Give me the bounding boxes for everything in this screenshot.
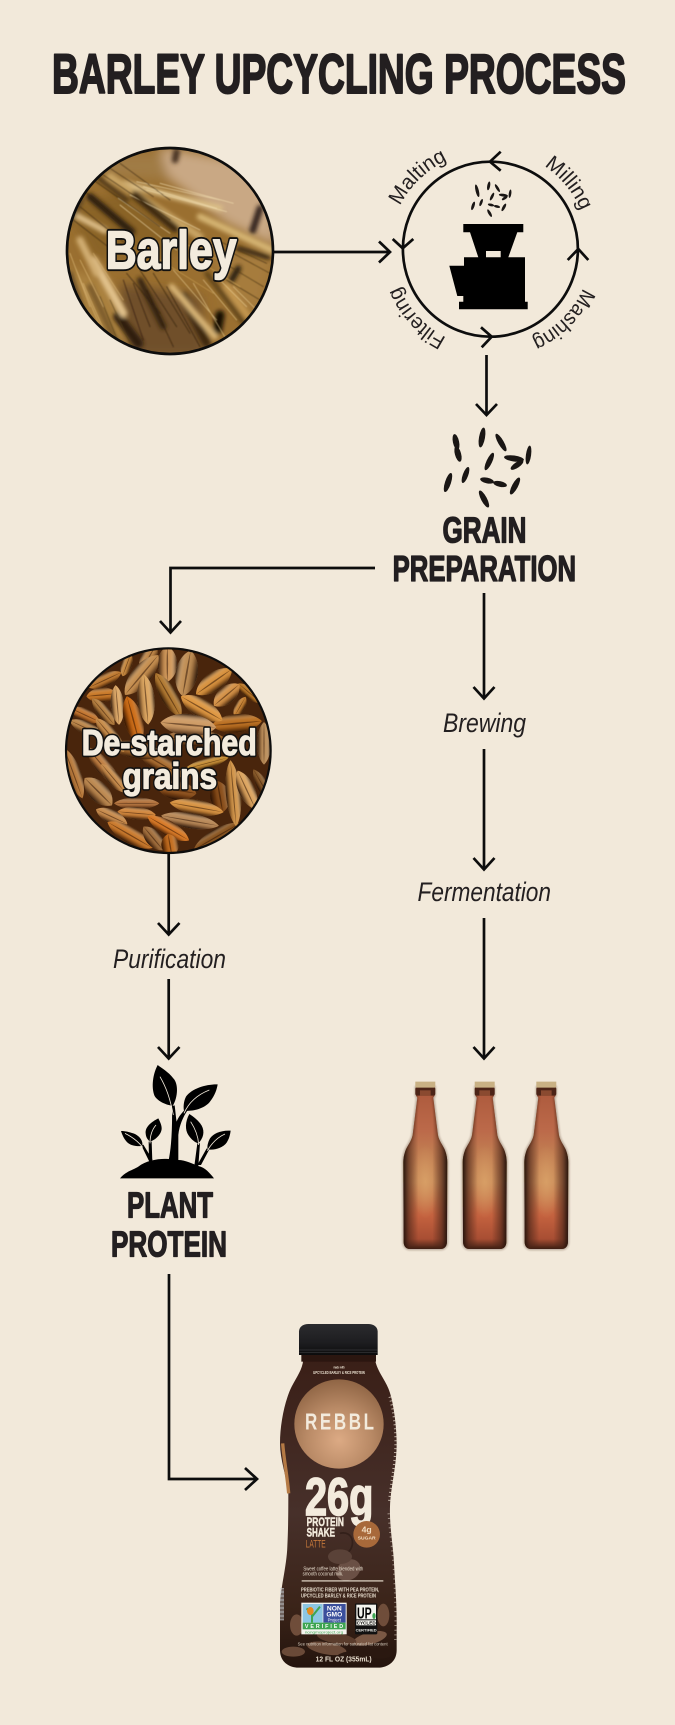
sugar badge: SUGAR [358, 1535, 376, 1541]
cycle labels: Malting [388, 151, 446, 204]
product name [306, 1515, 344, 1550]
logo circle [294, 1379, 384, 1469]
arrow: grain preparation to de-starched grains [160, 568, 375, 632]
heading: grain preparation: PREPARATION [393, 548, 576, 589]
icon: grains [442, 427, 532, 509]
arrow: barley to cycle [273, 242, 390, 262]
label: de-starched grains: De-starched [82, 722, 257, 763]
arrow: grain preparation to brewing [474, 593, 494, 698]
non-gmo badge [301, 1603, 347, 1634]
beer bottle 3 [524, 1082, 568, 1249]
non-gmo badge: VERIFIED [305, 1624, 343, 1630]
bottle body [280, 1359, 397, 1668]
upcycled badge: CYCLED [357, 1621, 376, 1626]
arrow: purification to plant protein [158, 979, 180, 1058]
label: de-starched grains [82, 722, 257, 796]
infographic [54, 53, 626, 1668]
description: Sweet coffee latte blended with [303, 1566, 363, 1572]
sugar badge [353, 1521, 380, 1548]
icon: plant [120, 1065, 231, 1178]
beer bottle 1 [403, 1082, 447, 1249]
benefits: PREBIOTIC FIBER WITH PEA PROTEIN, [301, 1588, 380, 1594]
cycle labels: Filtering [390, 287, 445, 350]
benefits [301, 1588, 380, 1599]
arrow: plant protein to shake [169, 1274, 257, 1490]
description [303, 1566, 363, 1577]
fine print: See nutrition information for saturated fat content [298, 1642, 388, 1647]
heading: grain preparation: GRAIN [442, 510, 526, 550]
upcycled badge: UP [357, 1605, 372, 1622]
icon: falling grains [470, 181, 512, 218]
product name: LATTE [306, 1538, 326, 1550]
panel: protein shake bottle [280, 1324, 397, 1668]
volume: 12 FL OZ (355mL) [316, 1655, 372, 1664]
heading: plant protein [111, 1184, 227, 1264]
logo text: REBBL [305, 1410, 374, 1435]
benefits: UPCYCLED BARLEY & RICE PROTEIN [301, 1593, 376, 1599]
label: purification: Purification [113, 944, 226, 974]
arrow: fermentation to bottles [474, 918, 494, 1058]
upcycled badge [355, 1603, 377, 1634]
icon: mill [449, 224, 528, 309]
icon: beer bottles [403, 1082, 568, 1249]
panel: processing cycle [388, 150, 596, 350]
description: smooth coconut milk. [303, 1571, 344, 1577]
label: de-starched grains: De-starched [82, 722, 257, 763]
label: fermentation: Fermentation [418, 877, 551, 907]
non-gmo badge: NON [327, 1606, 342, 1613]
top claim: UPCYCLED BARLEY & RICE PROTEIN [313, 1370, 365, 1375]
label: Barley: Barley [106, 220, 237, 280]
top claim [313, 1365, 365, 1375]
arrow: brewing to fermentation [474, 749, 494, 870]
non-gmo badge: GMO [326, 1612, 342, 1619]
sugar badge: 4g [362, 1525, 372, 1535]
non-gmo badge: Project [328, 1617, 342, 1622]
heading: grain preparation [393, 510, 576, 589]
panel: de-starched grains photo circle [64, 647, 272, 854]
beer bottle 2 [463, 1082, 507, 1249]
cycle labels: Milling [546, 155, 590, 210]
heading: plant protein: PLANT [127, 1184, 213, 1226]
panel: barley photo circle [60, 140, 280, 360]
product name: SHAKE [307, 1526, 335, 1540]
arrow: de-starched grains to purification [158, 854, 180, 934]
non-gmo badge: nongmoproject.org [305, 1630, 343, 1634]
bottle cap [299, 1324, 378, 1362]
label: brewing: Brewing [443, 708, 526, 738]
upcycled badge: CERTIFIED [356, 1627, 377, 1632]
coffee beans [282, 1533, 393, 1663]
product name: PROTEIN [307, 1515, 344, 1529]
cycle ring with arrowheads [393, 152, 588, 347]
heading: plant protein: PROTEIN [111, 1224, 227, 1264]
protein amount: 26g [305, 1468, 373, 1527]
cycle labels [388, 151, 596, 350]
label edges [282, 1397, 396, 1640]
cycle labels: Mashing [532, 290, 596, 349]
label: de-starched grains: grains [122, 756, 217, 796]
top claim: made with [333, 1365, 345, 1369]
label: Barley: Barley [106, 220, 237, 280]
arrow: cycle to grain preparation [476, 355, 497, 415]
label: de-starched grains: grains [122, 756, 217, 796]
